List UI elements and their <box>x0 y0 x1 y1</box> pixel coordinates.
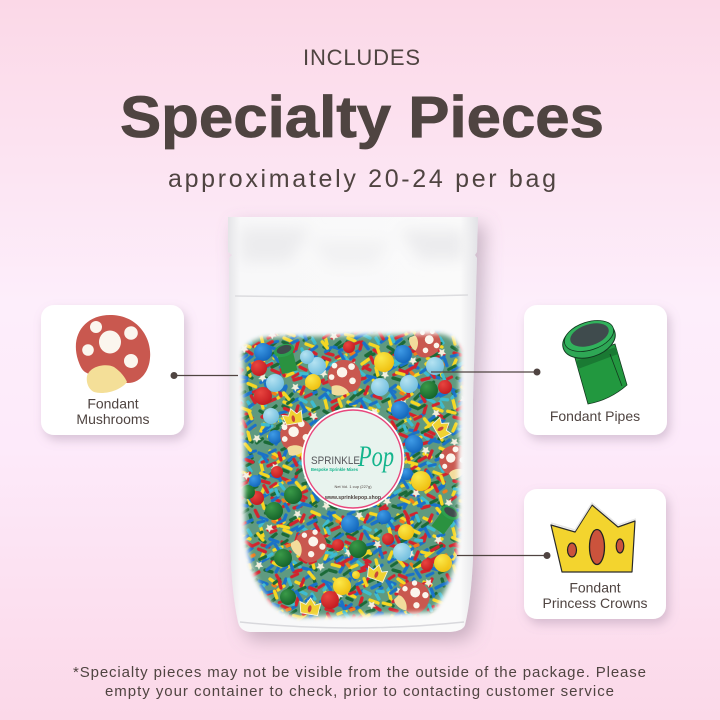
brand tagline: Bespoke Sprinkle Mixes <box>311 467 358 472</box>
connector: pipes <box>431 368 540 376</box>
sprinkle mix <box>235 325 476 623</box>
subtitle: approximately 20-24 per bag <box>168 165 556 193</box>
fondant crowns in mix <box>281 407 454 616</box>
brand script: Pop <box>357 440 394 473</box>
net weight: Net Vol. 1 cup (227g) <box>334 484 372 489</box>
bag zip seal <box>235 295 468 297</box>
fondant mushrooms in mix <box>280 330 462 614</box>
card: fondant princess crowns <box>524 489 666 619</box>
card label: Mushrooms <box>76 411 150 427</box>
footnote <box>73 664 646 700</box>
title: Specialty Pieces <box>120 85 604 150</box>
icon: mushroom <box>76 315 150 393</box>
footnote: *Specialty pieces may not be visible from the outside of the package. Please <box>73 664 646 681</box>
website: www.sprinklepop.shop <box>324 495 382 501</box>
eyebrow: includes: INCLUDES <box>303 45 420 70</box>
footnote: empty your container to check, prior to contacting customer service <box>105 683 614 700</box>
connector: mushrooms <box>170 372 238 379</box>
card label: Fondant Pipes <box>550 408 640 424</box>
sprinkle balls <box>241 341 452 609</box>
bag pouch <box>228 217 478 632</box>
card label: Fondant <box>569 580 621 596</box>
card label: Princess Crowns <box>542 595 648 611</box>
card: fondant pipes <box>524 305 667 435</box>
bag bottom fold <box>240 622 464 628</box>
connector: crowns <box>457 552 550 559</box>
icon: green pipe <box>558 315 627 404</box>
brand wordmark: SPRINKLE <box>311 455 360 467</box>
card: fondant mushrooms <box>41 305 184 435</box>
card label: Fondant <box>87 396 139 412</box>
icon: crown <box>551 503 636 572</box>
fondant pipes in mix <box>272 341 465 537</box>
bag translucent top haze <box>244 230 462 260</box>
round brand label <box>302 408 404 510</box>
product bag <box>228 217 478 632</box>
